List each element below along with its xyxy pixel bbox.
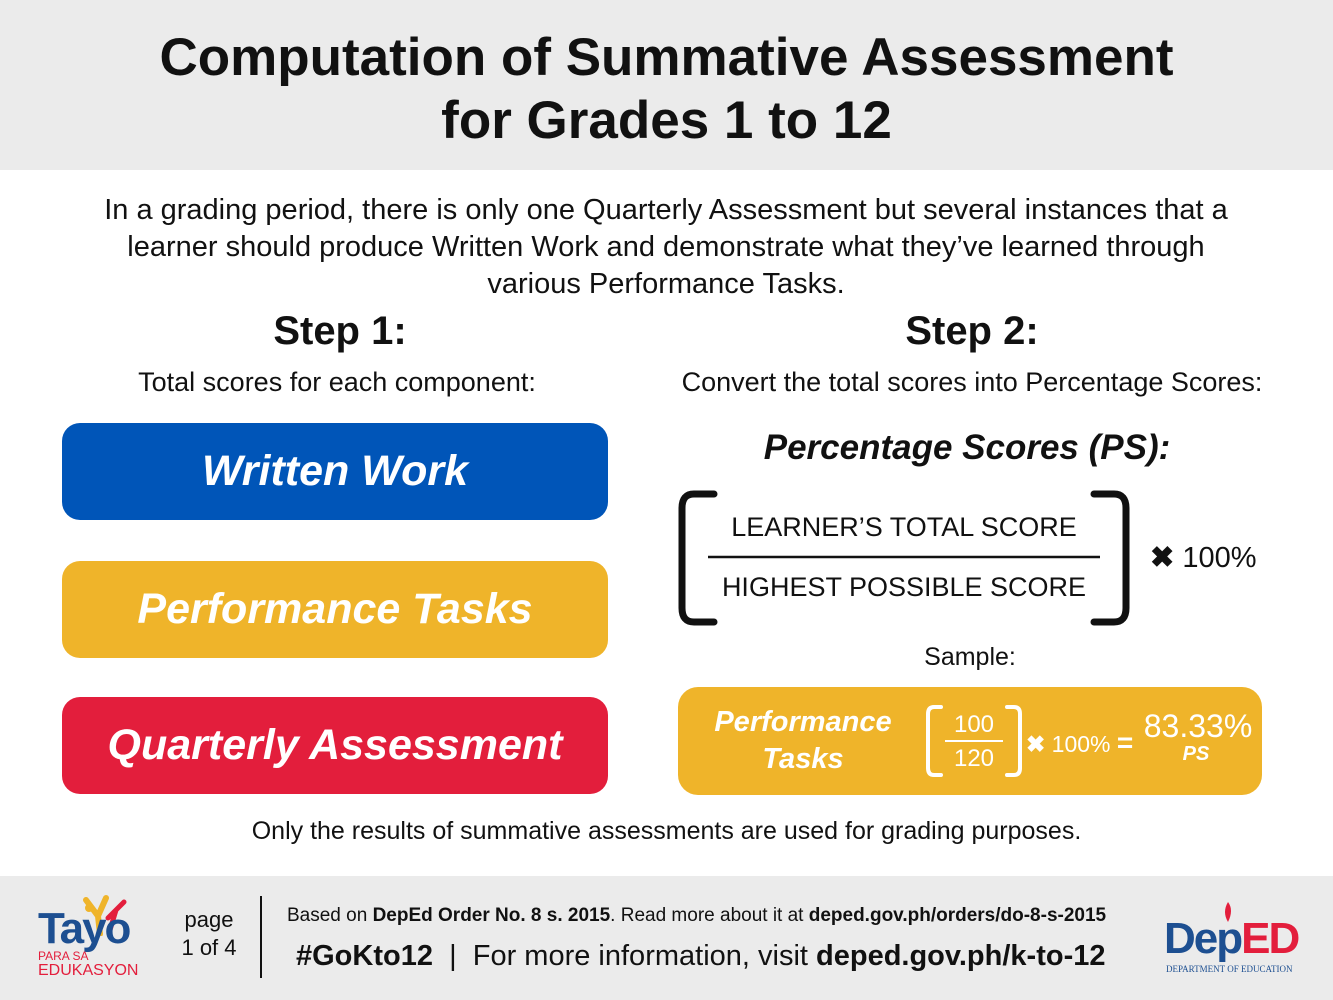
footnote: Only the results of summative assessments are used for grading purposes. (252, 817, 1081, 845)
sample fraction (954, 711, 994, 772)
sample box: 83.33% (1144, 708, 1252, 744)
sample label text (714, 706, 892, 775)
sample result: ✖ 100% = (1026, 727, 1133, 758)
formula heading: Percentage Scores (PS): (764, 428, 1170, 467)
sample label: Sample: (924, 643, 1016, 671)
title (159, 28, 1174, 150)
sample fraction: 100 (954, 711, 994, 738)
sample box: PS (1183, 743, 1209, 765)
reference line: Based on DepEd Order No. 8 s. 2015. Read more about it at deped.gov.ph/orders/do-8-s-2015 (287, 905, 1106, 926)
denominator: HIGHEST POSSIBLE SCORE (722, 572, 1086, 602)
hashtag and link: #GoKto12 | For more information, visit deped.gov.ph/k-to-12 (296, 940, 1106, 972)
sample box (678, 687, 1262, 795)
logo: Tayo (38, 895, 138, 979)
logo: DepED: DepED (1164, 914, 1298, 963)
intro text: In a grading period, there is only one Quarterly Assessment but several instances that a learner should produce Written Work and demonstrate what they’ve learned through various Performance Tasks. (104, 194, 1228, 300)
logo: DepED: DEPARTMENT OF EDUCATION (1166, 964, 1292, 974)
header band (0, 0, 1333, 170)
numerator: LEARNER’S TOTAL SCORE (731, 512, 1077, 542)
logo: DepED (1164, 902, 1298, 974)
box: quarterly assessment: Quarterly Assessment (108, 721, 562, 769)
logo: Tayo: EDUKASYON (38, 962, 138, 979)
box: written work (62, 423, 608, 520)
box: performance tasks (62, 561, 608, 658)
title: for Grades 1 to 12 (441, 91, 892, 150)
box: performance tasks: Performance Tasks (137, 585, 533, 633)
box: written work: Written Work (202, 447, 468, 495)
box: quarterly assessment (62, 697, 608, 794)
step 2 heading: Step 2: (905, 309, 1039, 353)
page number: 1 of 4 (181, 935, 237, 960)
logo: Tayo: PARA SA (38, 949, 88, 963)
footer (0, 876, 1333, 1000)
sample label text: Performance (714, 706, 892, 738)
page number: page (185, 907, 233, 932)
multiply 100%: ✖ 100% (1150, 542, 1257, 574)
step 2 subtitle: Convert the total scores into Percentage Scores: (682, 367, 1262, 397)
step 1 heading: Step 1: (273, 309, 407, 353)
formula (678, 490, 1257, 626)
sample fraction: 120 (954, 745, 994, 772)
step 1 subtitle: Total scores for each component: (138, 367, 536, 397)
title: Computation of Summative Assessment (159, 28, 1174, 87)
logo: Tayo: Tayo (38, 904, 129, 953)
sample label text: Tasks (762, 743, 844, 775)
page number (181, 907, 237, 960)
